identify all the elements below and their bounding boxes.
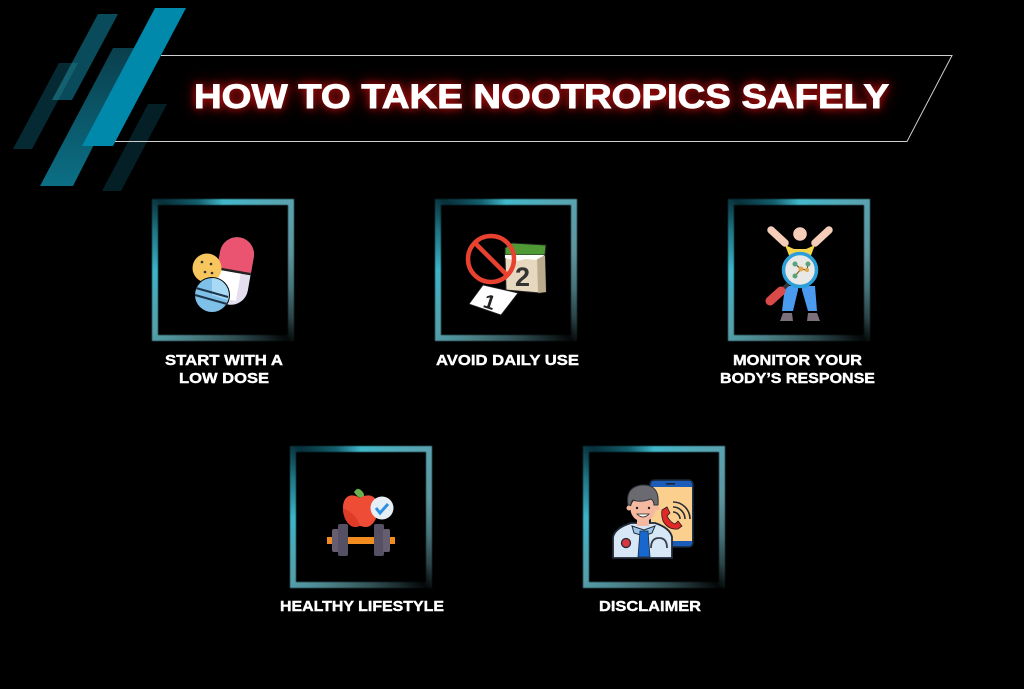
decorative slanted bars — [13, 8, 186, 191]
icon: calendar with no sign: 2 — [515, 262, 530, 292]
icon: calendar with no sign: 1 — [481, 291, 498, 315]
card: start with a low dose — [151, 198, 295, 387]
icon: pills — [192, 237, 254, 312]
banner outline — [115, 56, 952, 142]
card: avoid daily use — [434, 198, 579, 369]
icon: body under magnifier — [766, 226, 833, 321]
card: disclaimer — [582, 445, 726, 615]
label: AVOID DAILY USE — [436, 353, 579, 369]
icon: calendar with no sign — [466, 234, 546, 316]
label: START WITH A — [165, 353, 284, 369]
label: HEALTHY LIFESTYLE — [280, 599, 444, 615]
icon: doctor and phone — [612, 479, 694, 559]
title banner — [115, 55, 953, 142]
label: LOW DOSE — [179, 371, 269, 387]
label: DISCLAIMER — [599, 599, 702, 615]
card: monitor your body's response — [720, 198, 875, 387]
card: healthy lifestyle — [280, 445, 444, 615]
icon: apple and dumbbell — [327, 488, 395, 556]
title: HOW TO TAKE NOOTROPICS SAFELY — [194, 78, 889, 116]
label: BODY’S RESPONSE — [720, 371, 875, 387]
label — [165, 353, 284, 387]
label: MONITOR YOUR — [733, 353, 863, 369]
label — [720, 353, 875, 387]
